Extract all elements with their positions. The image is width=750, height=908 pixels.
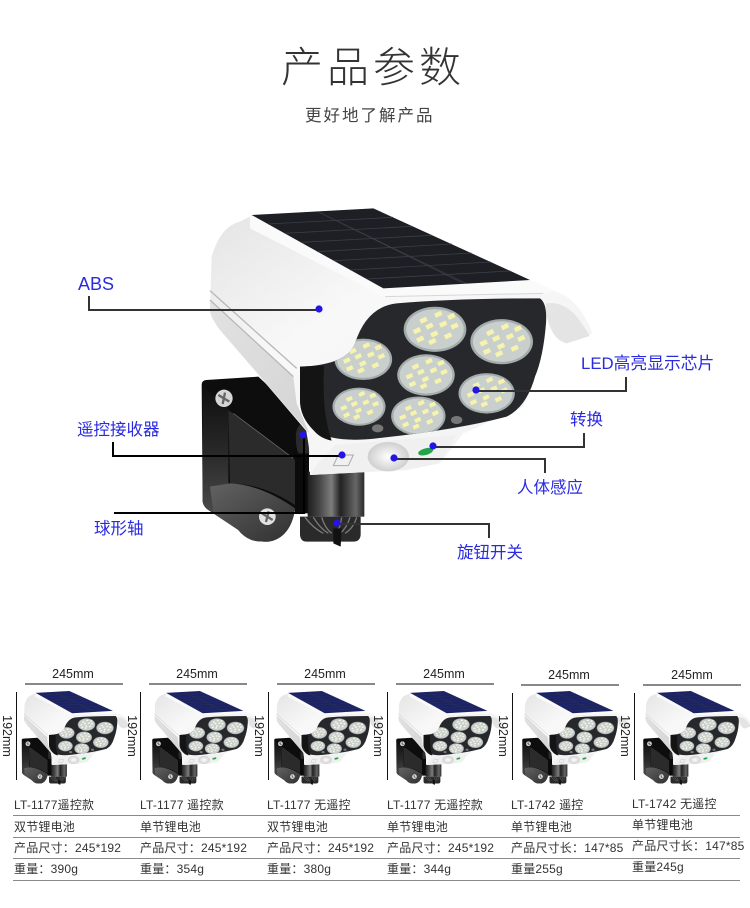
product variant 3: 双节锂电池 <box>267 819 328 834</box>
product variant 2: 192mm <box>125 715 139 757</box>
product variant 5: 单节锂电池 <box>511 819 572 834</box>
product variant 2: 单节锂电池 <box>140 819 201 834</box>
callout: remote receiver <box>77 420 346 459</box>
callout: mode switch <box>429 410 603 450</box>
product variant 3: 192mm <box>252 715 266 757</box>
product variant 4: 产品尺寸：245*192 <box>387 841 494 855</box>
product variant 4: 245mm <box>423 667 465 681</box>
product variant 1: 192mm <box>0 715 14 757</box>
product variant 5: 245mm <box>548 668 590 682</box>
product variant 6: 单节锂电池 <box>632 817 693 832</box>
product variant 3: 重量：380g <box>267 862 331 876</box>
product variant 3 <box>252 667 383 876</box>
product variant 1: 重量：390g <box>14 862 78 876</box>
title: 产品参数 <box>281 44 465 91</box>
callout: rotary switch <box>333 519 523 562</box>
callout: ABS <box>78 274 323 313</box>
product variant 4: LT-1177 无遥控款 <box>387 798 483 812</box>
callout: ball joint <box>94 431 307 538</box>
main product image: solar camera light <box>202 208 592 547</box>
product variant 4: 重量：344g <box>387 862 451 876</box>
product variant 6: 重量245g <box>632 860 684 874</box>
product variant 3: LT-1177 无遥控 <box>267 798 351 812</box>
product variant 1: LT-1177遥控款 <box>14 798 94 812</box>
callout: remote receiver: 遥控接收器 <box>77 420 160 439</box>
product variant 5: 重量255g <box>511 862 563 876</box>
product variant 5 <box>496 668 631 876</box>
product variant 2: 产品尺寸：245*192 <box>140 841 247 855</box>
callout: human sensor <box>390 454 583 497</box>
callout: human sensor: 人体感应 <box>517 478 583 497</box>
product variant 2: LT-1177 遥控款 <box>140 798 224 812</box>
product variant 4: 单节锂电池 <box>387 819 448 834</box>
product variant 6 <box>618 668 750 874</box>
product variant 3: 产品尺寸：245*192 <box>267 841 374 855</box>
product variant 1: 245mm <box>52 667 94 681</box>
product variant 2: 245mm <box>176 667 218 681</box>
callout: mode switch: 转换 <box>570 410 603 429</box>
callout: ball joint: 球形轴 <box>94 519 144 538</box>
product variant 1: 双节锂电池 <box>14 819 75 834</box>
product variant 5: 192mm <box>496 715 510 757</box>
product variant 6: 245mm <box>671 668 713 682</box>
product variant 1 <box>0 667 130 876</box>
product variant 4 <box>371 667 505 876</box>
product variant 2: 重量：354g <box>140 862 204 876</box>
product variant 5: 产品尺寸长：147*85 <box>511 841 624 855</box>
callout: LED chip <box>472 354 714 394</box>
product variant 5: LT-1742 遥控 <box>511 798 583 812</box>
product variant 2 <box>125 667 261 876</box>
product variant 6: LT-1742 无遥控 <box>632 797 717 811</box>
subtitle: 更好地了解产品 <box>305 106 434 125</box>
product variant 6: 产品尺寸长：147*85 <box>632 839 745 853</box>
product variant 3: 245mm <box>304 667 346 681</box>
callout: rotary switch: 旋钮开关 <box>457 543 523 562</box>
product variant 1: 产品尺寸：245*192 <box>14 841 121 855</box>
callout: ABS: ABS <box>78 274 114 294</box>
product variant 4: 192mm <box>371 715 385 757</box>
product variant 6: 192mm <box>618 715 632 757</box>
callout: LED chip: LED高亮显示芯片 <box>581 354 714 373</box>
